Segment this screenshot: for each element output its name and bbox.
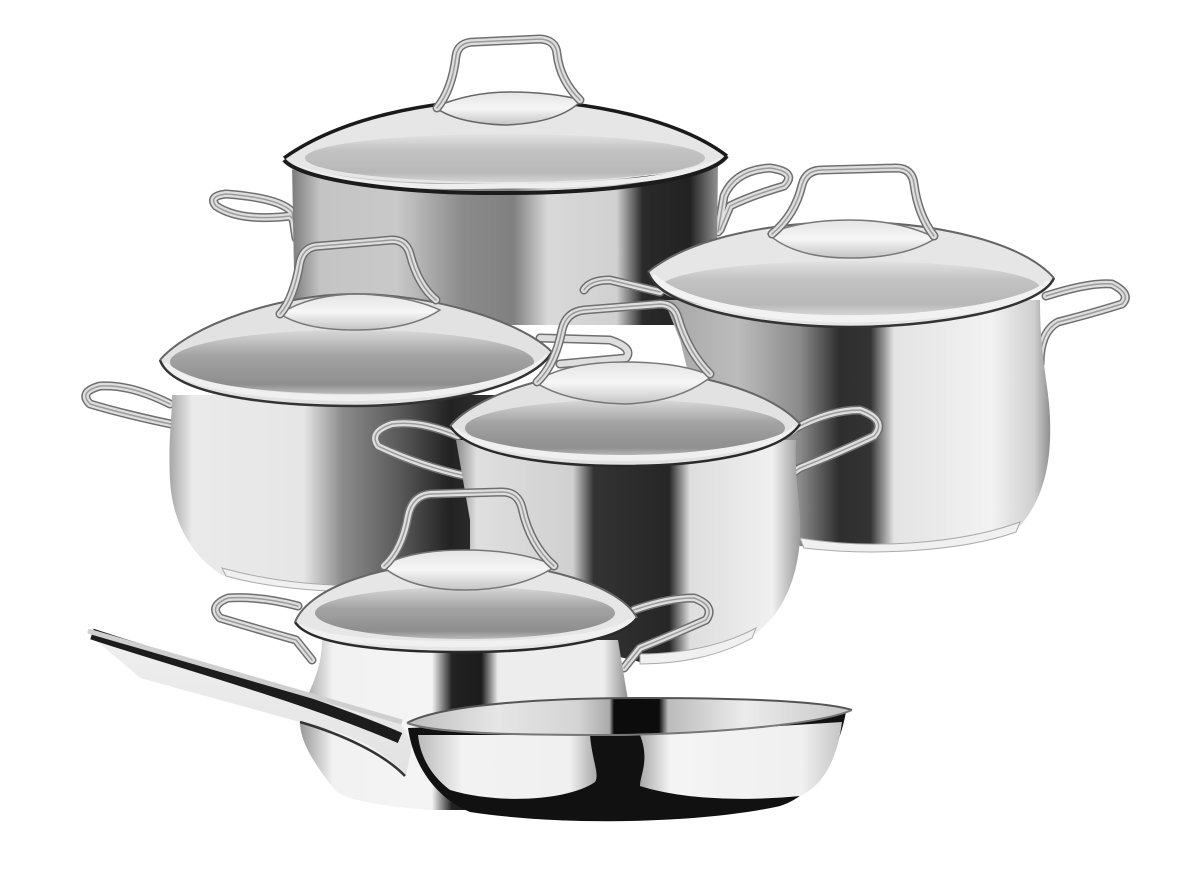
large back pot	[214, 39, 789, 325]
middle pot base rim	[640, 628, 756, 664]
small pot lid rim	[299, 620, 633, 644]
small pot right handle	[624, 598, 709, 668]
middle pot lid handle	[537, 304, 710, 382]
back pot lid knob dome	[435, 92, 582, 125]
left pot lid handle	[280, 240, 436, 314]
left pot lid knob dome	[280, 294, 440, 330]
small pot lid inner glass	[315, 587, 615, 639]
back pot lid glass	[284, 100, 727, 184]
back pot body	[292, 165, 718, 325]
right pot base rim	[800, 522, 1020, 552]
small pot lid handle	[384, 492, 554, 566]
small pot	[216, 492, 709, 810]
back pot right handle	[718, 168, 789, 232]
right pot lid inner glass	[660, 261, 1040, 315]
small pot body	[300, 640, 628, 810]
left pot lid rim	[164, 356, 548, 398]
small pot lid knob dome	[382, 550, 556, 590]
small pot lid glass	[295, 562, 637, 652]
right pot lid rim	[652, 276, 1050, 319]
right pot body	[664, 300, 1050, 551]
left pot base rim	[222, 568, 470, 592]
frying pan right reflection	[640, 722, 842, 799]
frying pan left reflection	[418, 735, 597, 799]
frying pan handle	[85, 630, 412, 776]
right pot lid handle	[772, 168, 934, 236]
middle pot body	[456, 440, 800, 662]
back pot lid handle	[437, 39, 580, 108]
frying pan body	[408, 712, 846, 821]
back pot lid inner glass	[305, 134, 705, 182]
back pot lid rim	[290, 160, 722, 187]
right pot lid knob dome	[768, 220, 936, 258]
middle pot lid inner glass	[465, 400, 785, 456]
left pot	[86, 240, 628, 592]
left pot lid inner glass	[170, 330, 534, 394]
middle pot lid rim	[454, 428, 796, 458]
small pot left handle	[216, 598, 312, 660]
frying pan	[85, 630, 852, 821]
right pot left handle	[584, 280, 660, 292]
middle pot right handle	[780, 410, 879, 504]
left pot body	[169, 395, 548, 590]
right pot lid glass	[648, 222, 1054, 327]
left pot lid glass	[160, 294, 552, 406]
left pot left handle	[86, 386, 214, 462]
back pot left handle	[214, 194, 330, 258]
left pot right handle	[540, 338, 628, 364]
middle pot lid glass	[450, 370, 800, 466]
frying pan interior and rim	[407, 698, 852, 735]
right pot right handle	[1040, 284, 1125, 364]
middle pot lid knob dome	[535, 362, 712, 404]
right pot	[584, 168, 1125, 552]
middle pot	[375, 304, 879, 664]
middle pot left handle	[375, 423, 484, 516]
